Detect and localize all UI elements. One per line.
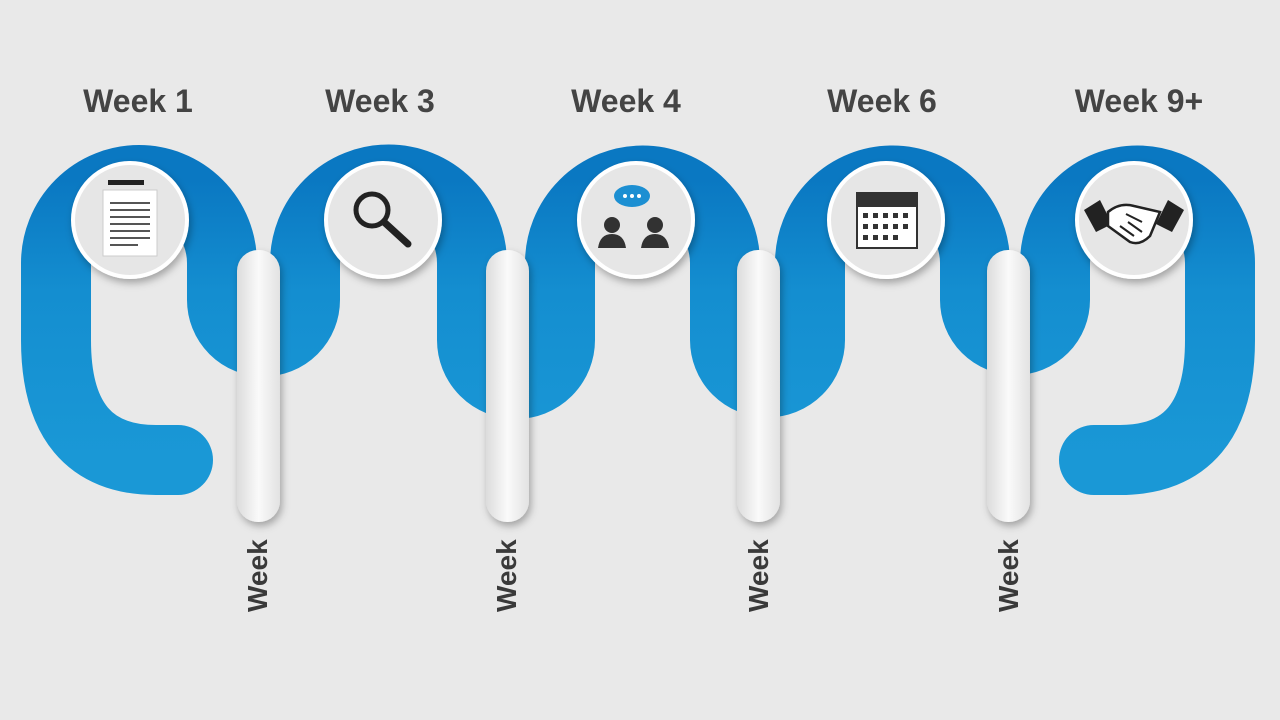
title: Week 4: Week 4 [571,83,681,119]
icon: document [73,163,187,277]
title: Week 1: Week 1 [83,83,193,119]
icon: handshake [1077,163,1191,277]
vertical label 1: Week [242,539,273,612]
icon: calendar [829,163,943,277]
title: Week 9+: Week 9+ [1075,83,1203,119]
icon: people talking [579,163,693,277]
pill 3 [737,250,780,522]
title: Week 3: Week 3 [325,83,435,119]
vertical label 3: Week [743,539,774,612]
pill 4 [987,250,1030,522]
title: Week 6: Week 6 [827,83,937,119]
icon: magnifier [326,163,440,277]
pill 1 [237,250,280,522]
pill 2 [486,250,529,522]
vertical label 4: Week [993,539,1024,612]
blue wave band [56,180,1220,460]
vertical label 2: Week [491,539,522,612]
